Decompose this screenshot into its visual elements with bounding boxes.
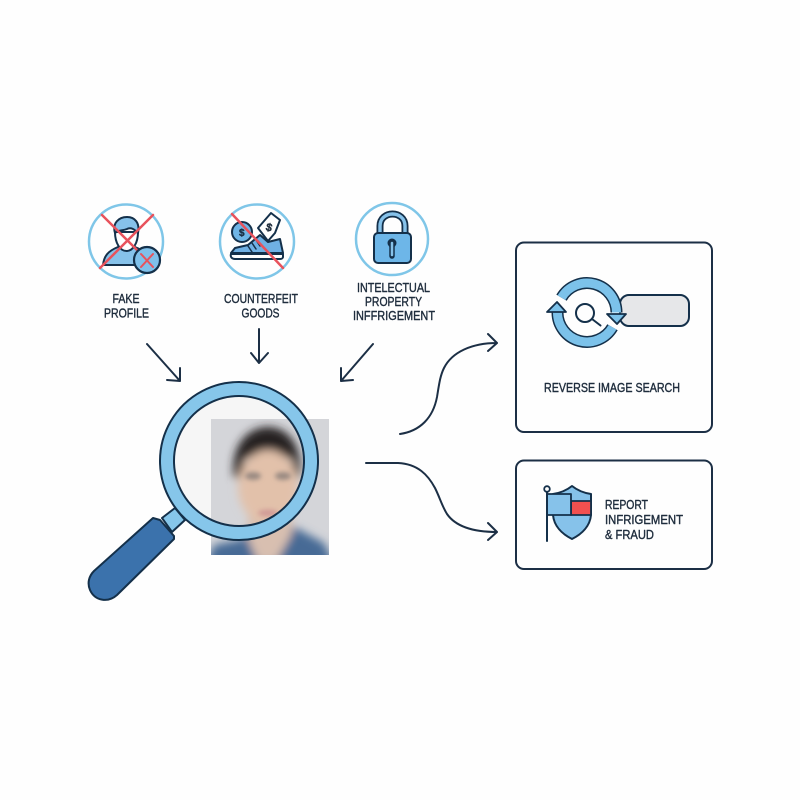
label: report infringement and fraud: REPORT [605,497,648,512]
icon: circular arrows with magnifier [547,283,626,342]
icon: counterfeit goods: $ [239,228,245,239]
arrow: to reverse image search [400,334,497,434]
lens interior [174,396,304,526]
label: fake profile: FAKE [112,291,140,306]
icon: counterfeit goods: $ [264,221,273,235]
panel: reverse image search [516,242,712,432]
label: report infringement and fraud: INFRIGEMENT [605,512,683,527]
label: counterfeit goods: GOODS [242,306,280,320]
label: report infringement and fraud [605,497,683,542]
label: fake profile [104,291,149,320]
arrow: counterfeit goods to magnifier [251,329,268,363]
label: report infringement and fraud: & FRAUD [605,527,654,542]
label: intellectual property infringement: INTELECTUAL [357,280,430,295]
arrow: fake profile to magnifier [147,344,180,381]
arrow: to report infringement [366,463,497,540]
icon: counterfeit goods [220,204,294,278]
label: reverse image search: REVERSE IMAGE SEARCH [544,380,680,395]
icon: search bar [620,295,689,326]
label: intellectual property infringement [353,280,435,323]
blurred portrait photo [211,419,329,555]
label: fake profile: PROFILE [104,306,149,320]
panel: report infringement and fraud [516,460,712,569]
icon: fake profile [89,204,163,278]
icon: shield with flag [544,486,591,541]
magnifying glass [89,382,318,600]
label: intellectual property infringement: PROPERTY [365,294,422,309]
arrow: intellectual property to magnifier [341,344,373,381]
label: counterfeit goods [224,291,298,320]
label: counterfeit goods: COUNTERFEIT [224,291,298,306]
label: intellectual property infringement: INFFRIGEMENT [353,308,435,323]
icon: intellectual property lock [356,203,428,275]
